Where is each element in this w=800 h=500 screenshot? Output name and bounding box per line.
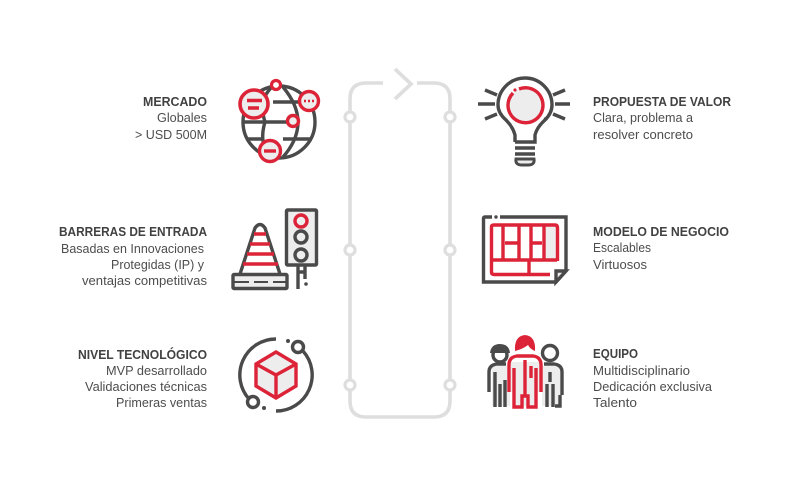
text block: mercado: > USD 500M (135, 128, 207, 142)
text block: propuesta de valor: PROPUESTA DE VALOR (593, 95, 731, 109)
text block: propuesta de valor (593, 95, 731, 142)
text block: propuesta de valor: resolver concreto (593, 128, 693, 142)
text block: equipo: EQUIPO (593, 347, 638, 361)
central cycle track (345, 69, 455, 417)
text block: barreras de entrada: Basadas en Innovaciones (61, 242, 204, 256)
text block: equipo: Dedicación exclusiva (593, 380, 712, 394)
icon: blueprint plan (484, 215, 566, 282)
icon: cube in orbit (240, 339, 312, 411)
text block: equipo (593, 347, 712, 410)
text block: modelo de negocio: MODELO DE NEGOCIO (593, 225, 729, 239)
text block: modelo de negocio (593, 225, 729, 272)
text block: nivel tecnologico: MVP desarrollado (106, 364, 207, 378)
text block: mercado: Globales (157, 111, 207, 125)
icon: globe network (240, 80, 318, 162)
icon: team of three (489, 335, 562, 407)
text block: barreras de entrada: ventajas competitivas (82, 274, 207, 288)
text block: modelo de negocio: Virtuosos (593, 258, 647, 272)
text block: nivel tecnologico: NIVEL TECNOLÓGICO (78, 347, 207, 362)
text block: barreras de entrada: Protegidas (IP) y (111, 258, 205, 272)
text block: barreras de entrada: BARRERAS DE ENTRADA (59, 225, 207, 239)
text block: barreras de entrada (59, 225, 207, 288)
text block: modelo de negocio: Escalables (593, 241, 651, 255)
icon: traffic cone and light (233, 210, 316, 289)
text block: mercado: MERCADO (143, 95, 207, 109)
text block: propuesta de valor: Clara, problema a (593, 111, 693, 125)
text block: nivel tecnologico (78, 347, 207, 410)
icon: light bulb (478, 78, 570, 165)
text block: equipo: Multidisciplinario (593, 364, 690, 378)
text block: nivel tecnologico: Primeras ventas (116, 396, 207, 410)
text block: equipo: Talento (593, 396, 637, 410)
text block: mercado (135, 95, 207, 142)
text block: nivel tecnologico: Validaciones técnicas (85, 380, 207, 394)
